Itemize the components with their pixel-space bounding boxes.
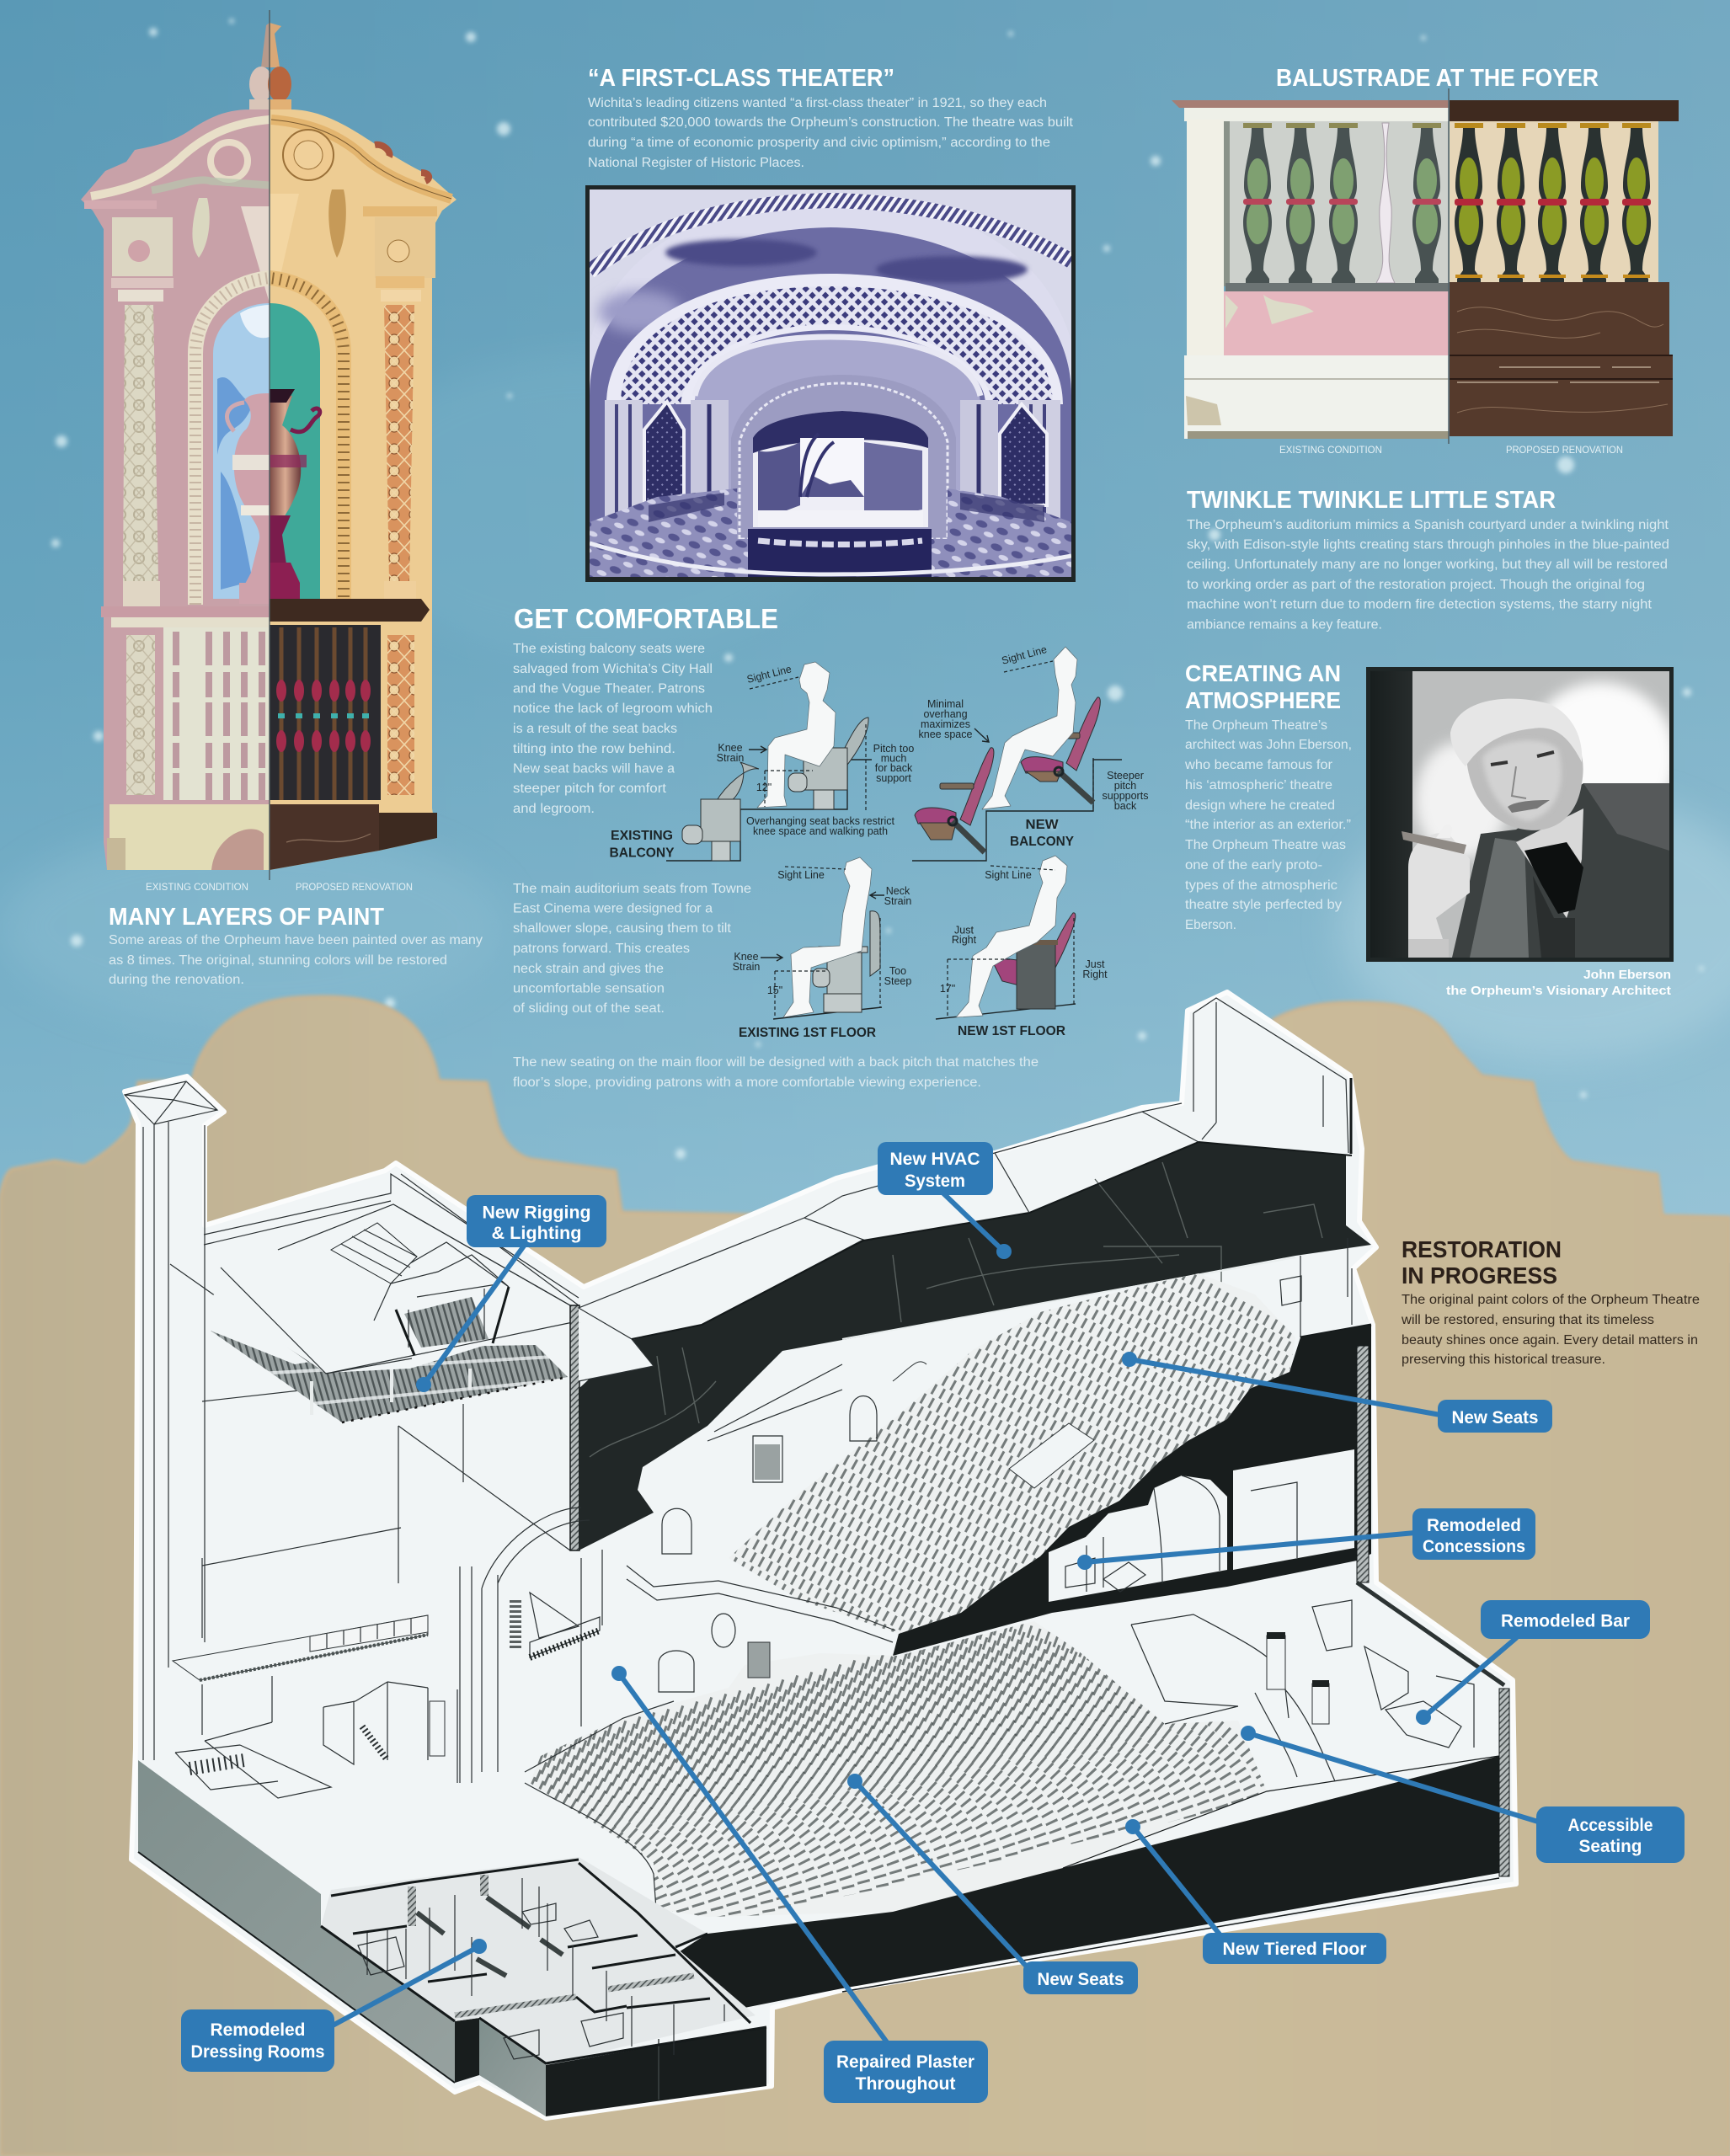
diagram: existing balcony seating: much	[881, 753, 906, 765]
text block: twinkle twinkle little star: to working order as part of the restoration project. Though the original fog	[1187, 578, 1645, 592]
text block: get comfortable: shallower slope, causing them to tilt	[513, 921, 732, 936]
text block: twinkle twinkle little star	[1187, 487, 1669, 632]
balcony seating	[733, 1273, 1293, 1634]
figure	[783, 857, 872, 1017]
callout: new seats (balcony)	[1122, 1352, 1552, 1433]
stage house walls and roof	[125, 1081, 579, 1760]
roof over auditorium	[579, 998, 1352, 1381]
callout: remodeled dressing rooms: Dressing Rooms	[190, 2042, 325, 2062]
text block: restoration in progress: preserving this historical treasure.	[1402, 1353, 1605, 1367]
diagram: new balcony seating: Sight Line	[1001, 643, 1048, 667]
diagram: existing first floor seating: Knee	[734, 951, 759, 963]
diagram: existing balcony seating: EXISTING	[611, 829, 673, 843]
upper seat	[788, 718, 868, 809]
diagram: existing balcony seating: Overhanging seat backs restrict	[746, 815, 895, 827]
lobby room	[1233, 1449, 1354, 1570]
text block: many layers of paint: MANY LAYERS OF PAINT	[109, 904, 384, 931]
caption: proposed renovation: PROPOSED RENOVATION	[1506, 446, 1623, 456]
diagram: new first floor seating: Right	[952, 934, 977, 946]
diagram: existing first floor seating: Strain	[733, 961, 760, 973]
text block: get comfortable: and legroom.	[513, 802, 595, 816]
callout: remodeled concessions	[1077, 1508, 1535, 1570]
diagram: new balcony seating: pitch	[1114, 780, 1136, 792]
diagram: new first floor seating: Just	[954, 925, 974, 937]
text block: creating an atmosphere: Eberson.	[1185, 918, 1236, 932]
callout: new HVAC system: New HVAC	[889, 1150, 980, 1169]
callout: accessible seating	[1241, 1726, 1685, 1863]
diagram: new balcony seating: BALCONY	[1010, 835, 1074, 849]
text block: get comfortable: New seat backs will have a	[513, 761, 675, 776]
cutaway: theater axonometric	[125, 992, 1516, 2118]
callout: new rigging and lighting: New Rigging	[482, 1203, 591, 1223]
roof slab over rigging	[211, 1204, 573, 1374]
text block: get comfortable: salvaged from Wichita’s City Hall	[513, 662, 713, 676]
text block: twinkle twinkle little star: sky, with Edison-style lights creating stars through pinholes in the blue-painted	[1187, 537, 1669, 552]
existing half	[81, 109, 270, 870]
right upper balcony wall	[1280, 1238, 1371, 1337]
text block: get comfortable: East Cinema were designed for a	[513, 901, 713, 916]
wall section column	[570, 1305, 579, 1550]
text block: get comfortable: The new seating on the main floor will be designed with a back pitch that matches the	[513, 1055, 1039, 1070]
figure	[757, 662, 836, 808]
text block: get comfortable: neck strain and gives the	[513, 962, 664, 976]
text block: creating an atmosphere: design where he created	[1185, 798, 1335, 813]
text block: a first-class theater: contributed $20,000 towards the Orpheum’s construction. The theatre was built	[588, 115, 1074, 130]
orchestra wall and lobby	[675, 1582, 1509, 2008]
callout: new tiered floor	[1125, 1819, 1386, 1964]
diagram: existing balcony seating	[610, 662, 914, 861]
proscenium and side wall details	[460, 1362, 926, 1783]
text block: creating an atmosphere: who became famous for	[1184, 758, 1332, 772]
heading: balustrade at the foyer: BALUSTRADE AT THE FOYER	[1276, 65, 1599, 92]
diagram: existing first floor seating: Neck	[886, 885, 910, 897]
text block: creating an atmosphere: architect was John Eberson,	[1185, 738, 1352, 752]
text block: many layers of paint	[109, 904, 483, 987]
text block: many layers of paint: during the renovation.	[109, 973, 244, 987]
illustration: proscenium box existing vs proposed	[81, 10, 457, 893]
text block: get comfortable: uncomfortable sensation	[513, 982, 665, 995]
caption: proposed renovation: PROPOSED RENOVATION	[296, 883, 413, 893]
callout: new rigging and lighting	[416, 1195, 606, 1392]
callout: remodeled concessions: Remodeled	[1427, 1516, 1521, 1535]
photo: portrait of John Eberson	[1366, 667, 1676, 962]
caption: John Eberson: the Orpheum’s Visionary Architect	[1446, 984, 1671, 998]
text block: restoration in progress: RESTORATION	[1402, 1236, 1562, 1262]
text block: restoration in progress: IN PROGRESS	[1402, 1262, 1557, 1289]
text block: a first-class theater: Wichita’s leading citizens wanted “a first-class theater” in 1921, so they each	[588, 96, 1047, 110]
diagram: existing first floor seating: Sight Line	[777, 869, 825, 881]
illustration: balustrade existing vs proposed	[1172, 88, 1679, 456]
callout: accessible seating: Accessible	[1568, 1816, 1653, 1835]
text block: creating an atmosphere: one of the early proto-	[1185, 858, 1322, 873]
callout: remodeled bar: Remodeled Bar	[1501, 1612, 1630, 1630]
text block: a first-class theater: during “a time of economic prosperity and civic optimism,” according to the	[588, 136, 1050, 150]
callout: new seats (main floor): New Seats	[1038, 1970, 1124, 1989]
text block: get comfortable: is a result of the seat backs	[513, 722, 677, 736]
diagram: new balcony seating: Steeper	[1107, 770, 1144, 782]
diagram: existing first floor seating: Too	[889, 965, 906, 977]
text block: creating an atmosphere: The Orpheum Theatre was	[1185, 838, 1346, 852]
text block: creating an atmosphere: “the interior as an exterior.”	[1185, 818, 1351, 832]
balcony cross-aisle opening	[1009, 1423, 1094, 1488]
text block: get comfortable: steeper pitch for comfort	[513, 782, 667, 796]
diagram: new balcony seating: overhang	[923, 708, 968, 720]
callout: repaired plaster throughout: Throughout	[856, 2074, 955, 2094]
text block: twinkle twinkle little star: TWINKLE TWINKLE LITTLE STAR	[1187, 487, 1556, 514]
text block: twinkle twinkle little star: machine won’t return due to modern fire detection systems, the starry night	[1187, 598, 1653, 611]
text block: creating an atmosphere: theatre style perfected by	[1185, 898, 1342, 912]
callout: repaired plaster throughout	[611, 1666, 988, 2103]
diagram: existing first floor seating: Steep	[884, 975, 911, 987]
callout: new HVAC system: System	[905, 1171, 965, 1191]
text block: get comfortable: and the Vogue Theater. Patrons	[513, 682, 705, 696]
photo: historic theater interior	[581, 185, 1080, 590]
text block: twinkle twinkle little star: ambiance remains a key feature.	[1187, 618, 1382, 632]
seat	[994, 913, 1076, 1009]
text block: many layers of paint: as 8 times. The original, stunning colors will be restored	[109, 953, 447, 968]
diagram: new first floor seating: Sight Line	[985, 869, 1032, 881]
text block: a first-class theater: “A FIRST-CLASS THEATER”	[588, 65, 894, 92]
lower seat	[682, 762, 759, 861]
diagram: existing balcony seating: Strain	[717, 752, 744, 764]
diagram: existing balcony seating: knee space and walking path	[753, 825, 888, 837]
diagram: existing balcony seating: Pitch too	[873, 743, 914, 755]
diagram: new balcony seating: Minimal	[927, 698, 964, 710]
text block: get comfortable: The main auditorium seats from Towne	[513, 882, 751, 896]
text block: restoration in progress: beauty shines once again. Every detail matters in	[1402, 1333, 1698, 1348]
text block: a first-class theater: National Register of Historic Places.	[588, 156, 804, 170]
diagram: existing first floor seating: 15"	[767, 985, 782, 996]
text block: restoration in progress	[1401, 1236, 1700, 1367]
callout: new tiered floor: New Tiered Floor	[1223, 1940, 1366, 1959]
text block: get comfortable: of sliding out of the seat.	[513, 1001, 665, 1016]
caption: existing condition: EXISTING CONDITION	[1279, 446, 1382, 456]
dark auditorium ceiling void	[579, 1142, 1371, 1550]
diagram: new balcony seating: maximizes	[921, 718, 970, 730]
diagram: new first floor seating: NEW 1ST FLOOR	[958, 1024, 1065, 1038]
text block: twinkle twinkle little star: ceiling. Unfortunately many are no longer working, but they all will be restored	[1187, 558, 1668, 572]
callout: remodeled concessions: Concessions	[1423, 1537, 1525, 1556]
diagram: new balcony seating: NEW	[1026, 818, 1059, 832]
building base shape	[125, 992, 1516, 2118]
text block: creating an atmosphere: his ‘atmospheric’ theatre	[1185, 778, 1332, 792]
diagram: existing balcony seating: support	[876, 772, 911, 784]
callout: new seats (balcony): New Seats	[1452, 1408, 1538, 1428]
proposed half	[1450, 100, 1679, 436]
callout: remodeled dressing rooms	[181, 1939, 487, 2072]
text block: many layers of paint: Some areas of the Orpheum have been painted over as many	[109, 933, 483, 947]
seat	[813, 911, 880, 1012]
diagram: new first floor seating: Just	[1086, 958, 1105, 970]
stage floor backstage	[173, 1615, 656, 1909]
background: tan theater skyline silhouette	[0, 996, 1730, 2156]
main floor seating	[531, 1624, 1265, 1917]
text block: creating an atmosphere: CREATING AN	[1185, 660, 1341, 686]
diagram: existing balcony seating: Knee	[718, 742, 743, 754]
text block: creating an atmosphere: types of the atmospheric	[1185, 878, 1338, 893]
upper seat	[1021, 697, 1100, 803]
diagram: new balcony seating	[912, 643, 1148, 861]
text block: creating an atmosphere: ATMOSPHERE	[1185, 687, 1341, 713]
diagram: new balcony seating: knee space	[919, 728, 973, 740]
diagram: existing balcony seating: BALCONY	[610, 846, 675, 861]
figure	[956, 856, 1067, 1017]
black structure under balcony	[893, 1325, 1371, 1656]
diagram: existing balcony seating: Sight Line	[745, 663, 793, 686]
caption: existing condition: EXISTING CONDITION	[146, 883, 248, 893]
text block: get comfortable: patrons forward. This creates	[513, 942, 690, 956]
callout: new HVAC system	[878, 1142, 1012, 1259]
text block: twinkle twinkle little star: The Orpheum’s auditorium mimics a Spanish courtyard under a twinkling night	[1187, 518, 1669, 532]
diagram: new first floor seating	[936, 856, 1108, 1038]
diagram: existing balcony seating: for back	[875, 762, 913, 774]
concessions room	[1049, 1476, 1227, 1602]
diagram: new balcony seating: suppports	[1103, 790, 1148, 802]
diagram: existing balcony seating: 12"	[756, 782, 772, 793]
text block: get comfortable: tilting into the row behind.	[513, 742, 675, 756]
lower seat	[915, 748, 994, 852]
text block: get comfortable	[513, 603, 1039, 1090]
caption: John Eberson: John Eberson	[1583, 968, 1671, 982]
rigging grid	[211, 1331, 568, 1422]
figure	[982, 647, 1077, 809]
callout: new seats (main floor)	[847, 1774, 1138, 1994]
diagram: new balcony seating: back	[1114, 800, 1137, 812]
diagram: existing first floor seating	[733, 857, 911, 1040]
text block: restoration in progress: will be restored, ensuring that its timeless	[1401, 1313, 1654, 1327]
diagram: new first floor seating: 17"	[940, 983, 955, 995]
text block: a first-class theater	[588, 65, 1074, 170]
finial	[249, 23, 291, 115]
diagram: existing first floor seating: Strain	[884, 895, 911, 907]
diagram: new first floor seating: Right	[1082, 969, 1108, 980]
callout: remodeled bar	[1416, 1600, 1650, 1725]
existing half	[1172, 100, 1449, 439]
callout: new rigging and lighting: & Lighting	[492, 1224, 581, 1243]
text block: get comfortable: The existing balcony seats were	[513, 642, 705, 656]
diagram: existing first floor seating: EXISTING 1ST FLOOR	[739, 1026, 876, 1040]
callout: repaired plaster throughout: Repaired Plaster	[836, 2052, 974, 2072]
text block: restoration in progress: The original paint colors of the Orpheum Theatre	[1402, 1293, 1700, 1307]
callout: remodeled dressing rooms: Remodeled	[211, 2020, 305, 2040]
text block: get comfortable: floor’s slope, providing patrons with a more comfortable viewing experience.	[513, 1075, 981, 1090]
text block: creating an atmosphere	[1184, 660, 1352, 932]
base walls	[138, 1760, 766, 2116]
text block: creating an atmosphere: The Orpheum Theatre’s	[1185, 718, 1327, 733]
proposed half	[270, 109, 457, 870]
caption: John Eberson	[1446, 968, 1671, 998]
text block: get comfortable: notice the lack of legroom which	[513, 702, 713, 716]
callout: accessible seating: Seating	[1578, 1837, 1642, 1856]
dressing rooms	[321, 1857, 766, 2065]
text block: get comfortable: GET COMFORTABLE	[514, 603, 778, 634]
